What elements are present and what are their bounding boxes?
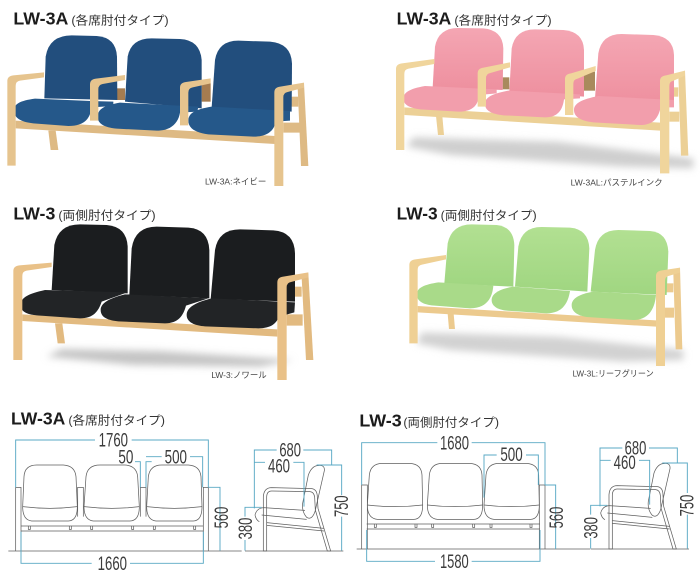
sofa panel: LW-3 green [397,203,683,378]
front view dimension lines [16,440,220,563]
front view dimension numbers: 50 [118,447,133,468]
heading: LW-3 drawing [359,411,499,431]
heading: LW-3A pink [397,8,552,28]
sofa panel: LW-3A navy [7,8,308,187]
floor shadow [417,332,683,362]
heading: LW-3A drawing: (各席肘付タイプ) [68,412,165,427]
front view dimension numbers: 1580 [440,552,469,573]
heading: LW-3 black: (両側肘付タイプ) [58,207,156,222]
wood arms and legs [13,263,308,380]
caption: LW-3L:リーフグリーン [573,367,654,378]
side view dimension lines [591,448,687,549]
side view dimension numbers: 750 [332,495,353,517]
front view dimension numbers [98,431,233,575]
side view dimension numbers: 460 [268,457,290,478]
side view dimension numbers: 380 [582,517,603,539]
wood frame rear and rail [404,71,688,156]
heading: LW-3 black [13,203,156,223]
side view dimension lines [245,450,342,551]
side view dimension numbers [582,439,699,539]
side view dimension numbers: 680 [625,439,646,460]
heading: LW-3A pink: (各席肘付タイプ) [454,12,552,27]
navy seat cushions [14,99,290,137]
front view dimension numbers: 1680 [440,433,469,454]
front view [8,465,242,551]
heading: LW-3A drawing: LW-3A [11,408,66,428]
heading: LW-3A drawing [11,408,165,428]
side view dimension numbers: 380 [236,518,257,539]
heading: LW-3 green: LW-3 [397,203,438,223]
front view dimension lines [362,443,556,561]
heading: LW-3 green: (両側肘付タイプ) [441,207,537,222]
black seat backs [52,224,295,302]
heading: LW-3A navy [13,8,169,28]
front view dimension numbers [440,433,568,573]
heading: LW-3 drawing: (両側肘付タイプ) [403,415,499,430]
wood frame rear and rail [22,273,313,360]
green seat cushions [417,282,656,320]
wood arms and legs [409,255,680,366]
wood arms and legs [396,59,685,173]
heading: LW-3 drawing: LW-3 [359,411,402,431]
heading: LW-3A pink: LW-3A [397,8,452,28]
pink seat backs [433,28,674,103]
black seat cushions [21,290,295,328]
sofa panel: LW-3 black [13,203,313,380]
front view dimension numbers: 1760 [99,431,128,452]
side view [591,463,689,549]
pink seat cushions [403,86,674,125]
wood frame rear and rail [418,268,682,349]
front view dimension numbers: 1660 [98,554,127,575]
wood arms and legs [7,72,304,186]
front view dimension numbers: 500 [165,447,187,468]
heading: LW-3A navy: LW-3A [13,8,69,28]
sofa panel: LW-3A pink [396,8,693,188]
side view [245,465,343,551]
front view dimension numbers: 560 [212,507,233,528]
caption: LW-3:ノワール [211,370,267,380]
caption: LW-3AL:パステルインク [571,178,663,188]
caption: LW-3A:ネイビー [205,177,266,187]
floor shadow [47,349,293,367]
green seat backs [444,224,668,295]
floor shadow [407,137,693,168]
side view dimension numbers: 460 [614,453,636,474]
dimension drawing panel: LW-3 [357,411,699,573]
side view dimension numbers [236,441,353,539]
front view dimension numbers: 500 [500,445,523,466]
heading: LW-3A navy: (各席肘付タイプ) [71,12,169,27]
wood frame rear and rail [16,83,308,166]
navy seat backs [44,35,292,112]
side view dimension numbers: 750 [678,495,699,516]
dimension drawing panel: LW-3A [8,408,353,575]
front view [357,463,590,549]
heading: LW-3 black: LW-3 [13,203,56,223]
heading: LW-3 green [397,203,537,223]
front view dimension numbers: 560 [547,507,568,528]
side view dimension numbers: 680 [279,441,301,462]
